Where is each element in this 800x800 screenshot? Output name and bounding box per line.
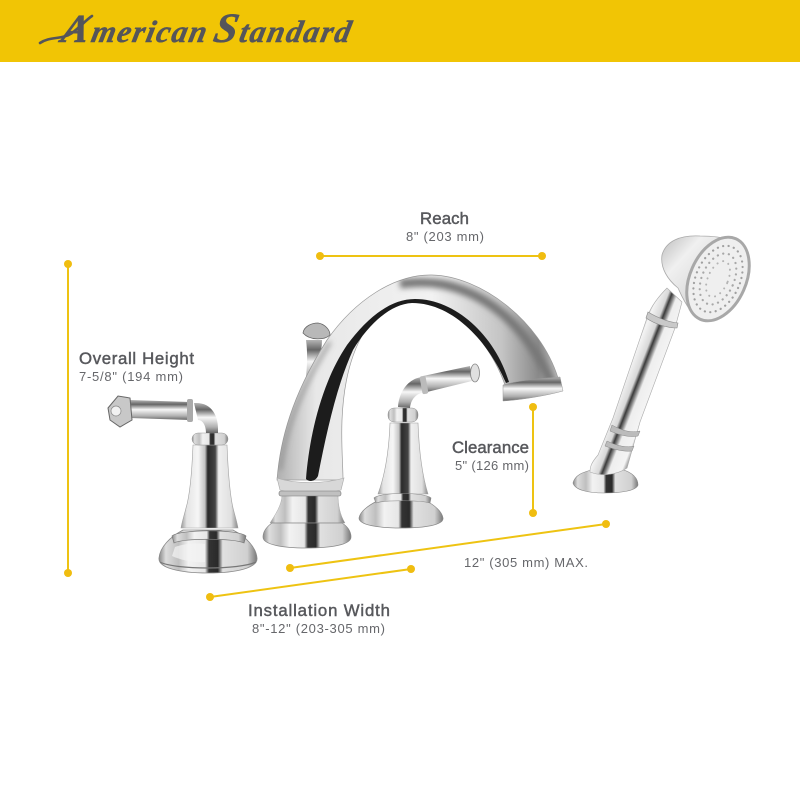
- dimension: installation width line: [206, 565, 415, 601]
- hand shower: [573, 227, 761, 493]
- header banner: [0, 0, 800, 62]
- label: clearance: Clearance: [452, 438, 529, 457]
- dimension: reach line: [316, 252, 546, 260]
- faucet: right handle: [359, 364, 480, 528]
- label: reach: Reach: [420, 209, 469, 228]
- logo wordmark: merican: [89, 14, 212, 49]
- shower head cup: [662, 236, 730, 310]
- shower head face: [675, 227, 761, 331]
- label: clearance: 5" (126 mm): [455, 458, 529, 473]
- label: reach: 8" (203 mm): [406, 229, 484, 244]
- faucet: back handle: [303, 323, 330, 385]
- faucet: spout: [263, 275, 563, 548]
- logo wordmark: [40, 5, 358, 52]
- label: installation width: 8"-12" (203-305 mm): [252, 621, 385, 636]
- label: overall height: 7-5/8" (194 mm): [79, 369, 183, 384]
- shower base: [573, 470, 638, 493]
- label: max spacing: 12" (305 mm) MAX.: [464, 555, 588, 570]
- faucet: left handle: [108, 396, 257, 573]
- logo wordmark: A: [55, 6, 94, 51]
- dimension: hand shower spacing line: [286, 520, 610, 572]
- shower handle: [590, 288, 682, 475]
- label: overall height: Overall Height: [79, 349, 194, 368]
- label: installation width: [248, 601, 390, 636]
- dimension: overall height line: [64, 260, 72, 577]
- logo wordmark: S: [210, 5, 243, 52]
- label: clearance: [452, 438, 529, 473]
- label: installation width: Installation Width: [248, 601, 390, 620]
- label: reach: [406, 209, 484, 244]
- dimension: clearance line: [529, 403, 537, 517]
- logo wordmark: tandard: [237, 14, 356, 49]
- label: overall height: [79, 349, 194, 384]
